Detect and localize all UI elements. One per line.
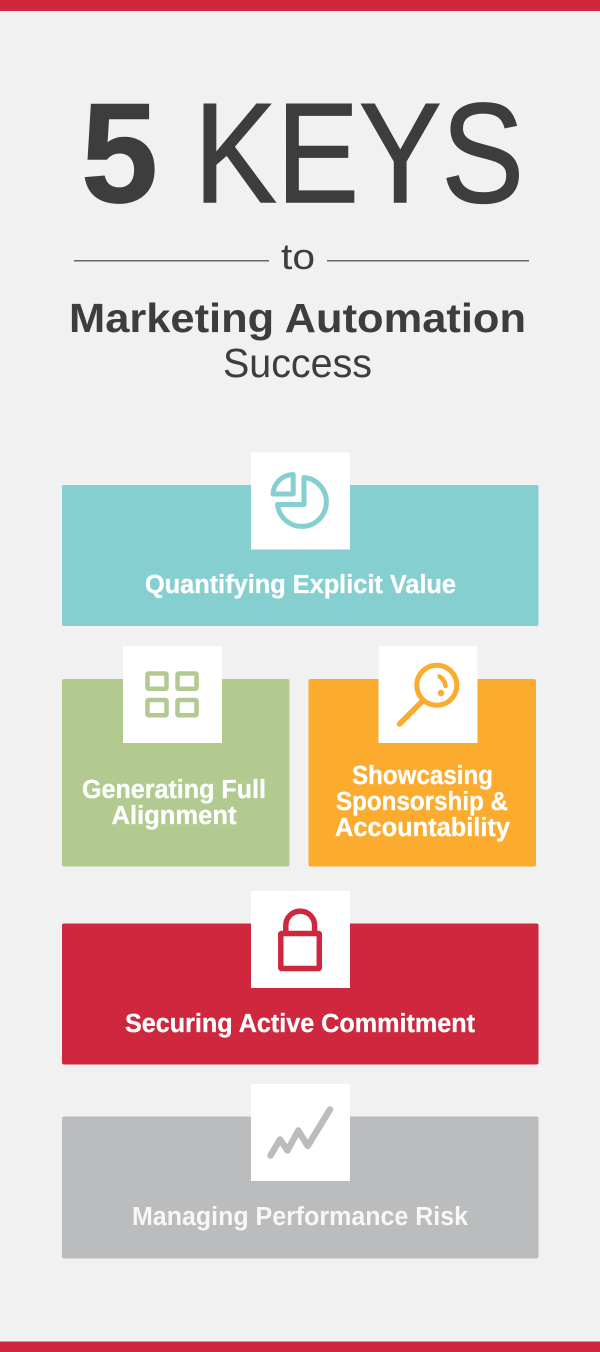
panel: Securing Active Commitment [62, 891, 538, 1064]
label: Showcasing Sponsorship and Accountability [335, 762, 511, 842]
label: Managing Performance Risk: Managing Performance Risk [132, 1203, 469, 1231]
icon: padlock [281, 911, 319, 968]
label: Showcasing Sponsorship and Accountability: Accountability [335, 814, 511, 842]
panel: Quantifying Explicit Value [62, 452, 538, 626]
top red bar [0, 0, 600, 11]
label: Securing Active Commitment: Securing Active Commitment [125, 1010, 475, 1038]
subtitle [69, 295, 526, 386]
panel: Managing Performance Risk [62, 1084, 538, 1258]
divider with the word to: to [281, 236, 315, 277]
bottom red bar [0, 1342, 600, 1352]
title word: KEYS: KEYS [194, 74, 524, 233]
label: Generating Full Alignment: Alignment [112, 802, 237, 830]
label: Showcasing Sponsorship and Accountability: Sponsorship & [336, 788, 508, 816]
icon: trend line [270, 1110, 330, 1156]
title [81, 74, 524, 233]
subtitle line: Marketing Automation: Marketing Automation [69, 295, 526, 341]
label: Generating Full Alignment [82, 776, 266, 830]
icon: pie chart [273, 474, 326, 526]
panel: Showcasing Sponsorship and Accountability [308, 646, 536, 866]
label: Generating Full Alignment: Generating Full [82, 776, 266, 804]
icon: grid [148, 674, 196, 715]
title number: 5: 5 [81, 74, 158, 233]
label: Showcasing Sponsorship and Accountability: Showcasing [352, 762, 493, 790]
label: Quantifying Explicit Value: Quantifying Explicit Value [145, 571, 456, 599]
panel: Generating Full Alignment [62, 646, 290, 866]
icon: magnifying glass [400, 665, 457, 724]
subtitle line: Success: Success [223, 340, 372, 386]
